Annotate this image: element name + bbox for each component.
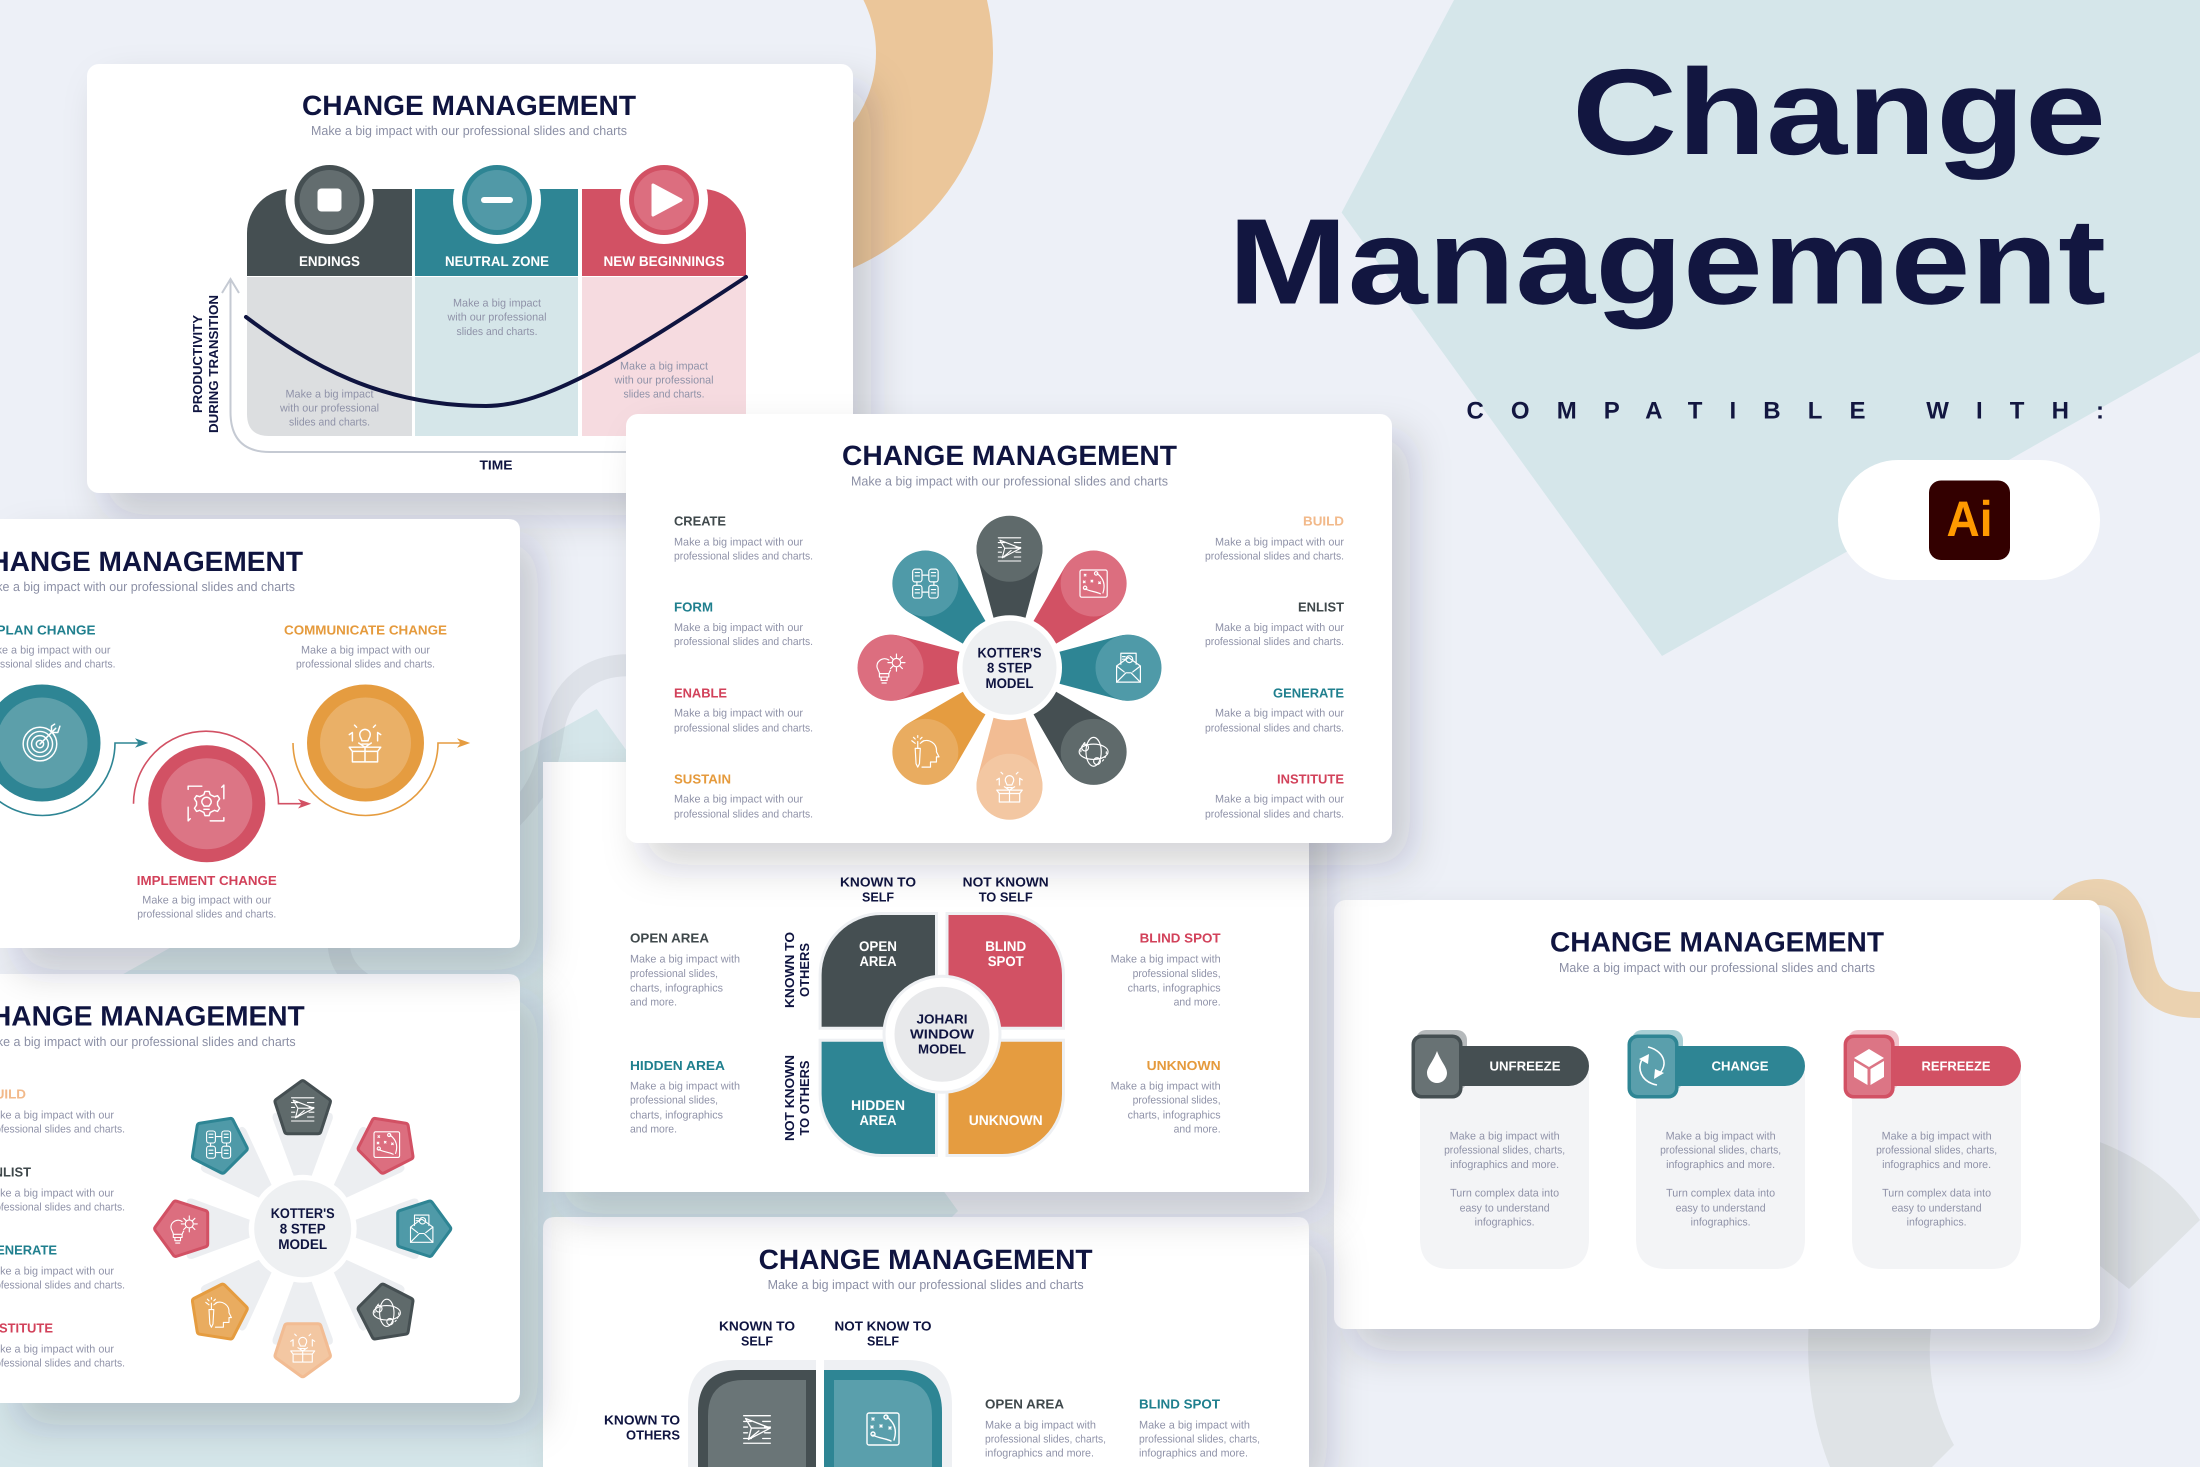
step: change (1628, 1030, 1805, 1269)
text: form: professional slides and charts. (674, 636, 813, 648)
column headers: SELF (867, 1334, 899, 1348)
text: generate (1205, 686, 1344, 734)
kotter flower chart: KOTTER'S (978, 644, 1042, 660)
column headers: KNOWN TO (719, 1318, 795, 1334)
panel: kotter pentagon slide (0, 974, 520, 1403)
step: unfreeze: professional slides, charts, (1444, 1144, 1565, 1156)
column body text: Make a big impact (453, 298, 541, 310)
text: institute (0, 1320, 125, 1370)
text: blind spot (1111, 930, 1221, 1008)
text: implement change (137, 873, 277, 920)
text: enable: Make a big impact with our (674, 708, 803, 720)
background shape: peach ring (853, 0, 993, 268)
column headers: NOT KNOW TO (834, 1318, 932, 1334)
column body text: slides and charts. (456, 326, 538, 338)
kotter pentagon wheel: KOTTER'S (271, 1205, 335, 1221)
text: hidden area: professional slides, (630, 1094, 718, 1106)
johari quadrants (822, 915, 1062, 1154)
panel: plan implement communicate slide (0, 519, 520, 948)
text: implement change: professional slides and charts. (137, 908, 276, 920)
text: communicate change: Make a big impact with our (301, 644, 430, 656)
circle: communicate (307, 684, 424, 802)
johari quadrants: HIDDEN (851, 1097, 905, 1113)
slide subtitle: Make a big impact with our professional slides and charts (311, 123, 627, 138)
text: build: Make a big impact with our (1215, 536, 1344, 548)
main title (1228, 44, 2106, 330)
panel: johari window slide (543, 762, 1309, 1192)
column headers (247, 189, 746, 276)
arrow: communicate (293, 738, 470, 816)
text: open area: infographics and more. (985, 1448, 1094, 1460)
background shape: peach squiggle (2050, 892, 2200, 1005)
step: change: Turn complex data into (1666, 1188, 1775, 1200)
column body text: slides and charts. (289, 416, 370, 428)
johari quadrants: UNKNOWN (969, 1112, 1043, 1128)
johari quadrants: MODEL (918, 1042, 966, 1056)
arrow: implement (134, 731, 311, 808)
text: blind spot (1139, 1396, 1260, 1460)
johari quadrants: OPEN (859, 938, 897, 954)
text: institute (1205, 772, 1344, 820)
text: unknown: charts, infographics (1128, 1110, 1221, 1122)
text: unknown: UNKNOWN (1147, 1058, 1221, 1073)
step: unfreeze: infographics and more. (1450, 1159, 1559, 1171)
text: unknown: Make a big impact with (1111, 1080, 1221, 1092)
step: unfreeze (1412, 1030, 1589, 1269)
icon: stop (286, 156, 374, 244)
productivity curve (246, 277, 746, 406)
step: change: infographics and more. (1666, 1159, 1775, 1171)
background shape: grey arc bottom (1808, 1320, 1954, 1467)
text: create: Make a big impact with our (674, 536, 803, 548)
y axis label (190, 295, 221, 433)
text: create: CREATE (674, 514, 726, 528)
slide title: CHANGE MANAGEMENT (1550, 926, 1884, 958)
rotated row headers: OTHERS (797, 943, 812, 997)
row header: OTHERS (626, 1428, 680, 1442)
text: form: FORM (674, 600, 713, 614)
text: open area: professional slides, (630, 968, 718, 980)
text: unknown (1111, 1058, 1221, 1136)
johari quadrants: AREA (860, 1112, 896, 1128)
text: blind spot: charts, infographics (1128, 982, 1221, 994)
step: change: professional slides, charts, (1660, 1144, 1781, 1156)
slide subtitle: Make a big impact with our professional slides and charts (768, 1277, 1084, 1292)
text: open area: and more. (630, 996, 677, 1008)
header labels: NEW BEGINNINGS (604, 253, 724, 269)
text: build: BUILD (1303, 514, 1344, 528)
text: blind spot: infographics and more. (1139, 1448, 1248, 1460)
text: blind spot: professional slides, (1133, 968, 1221, 980)
text: blind spot: Make a big impact with (1111, 954, 1221, 966)
column headers: SELF (862, 890, 894, 904)
text: enable: professional slides and charts. (674, 722, 813, 734)
text: open area: professional slides, charts, (985, 1434, 1106, 1446)
kotter pentagon wheel: MODEL (278, 1236, 328, 1252)
text: institute: INSTITUTE (1277, 772, 1344, 786)
kotter flower chart: 8 STEP (987, 660, 1032, 676)
step: refreeze: professional slides, charts, (1876, 1144, 1997, 1156)
column headers: KNOWN TO (840, 874, 916, 890)
text: sustain: SUSTAIN (674, 772, 731, 786)
text: communicate change: professional slides and charts. (296, 658, 435, 670)
rotated row headers: KNOWN TO (782, 932, 797, 1008)
rotated row headers (782, 932, 812, 1141)
text: blind spot: and more. (1174, 996, 1221, 1008)
text: form (674, 600, 813, 648)
kotter pentagon wheel (158, 1084, 448, 1374)
y axis label: PRODUCTIVITY (190, 315, 205, 413)
icon: Ai logo (1929, 480, 2010, 560)
johari quadrants: AREA (860, 953, 896, 969)
text: create (674, 514, 813, 562)
text: open area: charts, infographics (630, 982, 723, 994)
column headers: NOT KNOWN (963, 874, 1049, 890)
slide title: CHANGE MANAGEMENT (759, 1244, 1093, 1275)
text: sustain: Make a big impact with our (674, 794, 803, 806)
slide subtitle: Make a big impact with our professional slides and charts (1559, 960, 1875, 975)
text: hidden area: HIDDEN AREA (630, 1058, 726, 1073)
step: unfreeze: easy to understand (1460, 1202, 1550, 1214)
step: refreeze: infographics and more. (1882, 1159, 1991, 1171)
text: create: professional slides and charts. (674, 550, 813, 562)
step: refreeze: easy to understand (1892, 1202, 1982, 1214)
header labels (299, 253, 724, 269)
icon: pause dash (453, 156, 541, 244)
text: build (1205, 514, 1344, 562)
step: change: CHANGE (1712, 1058, 1769, 1074)
column body text: with our professional (279, 402, 379, 414)
step: change: infographics. (1691, 1216, 1751, 1228)
text: enlist: Make a big impact with our (1215, 622, 1344, 634)
text: blind spot: Make a big impact with (1139, 1420, 1250, 1432)
column body text: slides and charts. (624, 388, 704, 400)
text: blind spot: BLIND SPOT (1140, 930, 1221, 946)
panel: kotter flower slide (626, 414, 1392, 843)
text: open area: Make a big impact with (630, 954, 740, 966)
column headers (840, 874, 1049, 904)
kotter flower chart: MODEL (986, 675, 1034, 691)
text: unknown: and more. (1174, 1124, 1221, 1136)
column bodies (247, 277, 746, 436)
column body text: with our professional (614, 374, 714, 386)
step: change: easy to understand (1676, 1202, 1766, 1214)
text: sustain (674, 772, 813, 820)
kotter flower chart (858, 516, 1162, 820)
row header: KNOWN TO (604, 1412, 680, 1428)
column headers (719, 1318, 932, 1348)
slide title: CHANGE MANAGEMENT (302, 90, 636, 121)
text: implement change: Make a big impact with our (142, 894, 272, 906)
text: generate (0, 1242, 125, 1292)
slide title: CHANGE MANAGEMENT (842, 440, 1177, 471)
text: communicate change (284, 622, 447, 670)
column body text: with our professional (447, 312, 546, 324)
johari quadrants: BLIND (985, 938, 1026, 954)
compatible with label: COMPATIBLE WITH: (1466, 398, 2104, 424)
text: hidden area: and more. (630, 1124, 677, 1136)
icon: play (620, 156, 708, 244)
main title: Management (1228, 194, 2106, 330)
badge: adobe illustrator (1838, 460, 2100, 580)
text: open area: Make a big impact with (985, 1420, 1096, 1432)
panel: bottom johari icon slide (543, 1217, 1309, 1467)
text: form: Make a big impact with our (674, 622, 803, 634)
text: communicate change: COMMUNICATE CHANGE (284, 622, 447, 638)
step: unfreeze: Turn complex data into (1450, 1188, 1559, 1200)
icon: Ai logo: Ai (1946, 491, 1992, 547)
text: open area: OPEN AREA (985, 1396, 1065, 1412)
text: hidden area: charts, infographics (630, 1110, 723, 1122)
row header (604, 1412, 680, 1442)
text: generate: professional slides and charts. (1205, 722, 1344, 734)
circle: plan (0, 684, 100, 802)
johari quadrants: JOHARI (916, 1012, 968, 1026)
step: unfreeze: Make a big impact with (1450, 1130, 1560, 1142)
text: enlist: professional slides and charts. (1205, 636, 1344, 648)
text: open area (985, 1396, 1106, 1460)
step: refreeze (1844, 1030, 2021, 1269)
arrow: plan (0, 738, 148, 816)
column body text: Make a big impact (620, 360, 708, 372)
background shape: teal polygon top right (1342, 0, 2200, 656)
step: refreeze: REFREEZE (1922, 1058, 1991, 1074)
header labels: ENDINGS (299, 253, 360, 269)
text: blind spot: professional slides, charts, (1139, 1434, 1260, 1446)
header labels: NEUTRAL ZONE (445, 253, 549, 269)
text: enable: ENABLE (674, 686, 727, 700)
step: unfreeze: infographics. (1475, 1216, 1535, 1228)
text: institute: Make a big impact with our (1215, 794, 1344, 806)
text: unknown: professional slides, (1133, 1094, 1221, 1106)
step: unfreeze: UNFREEZE (1490, 1058, 1561, 1074)
text: hidden area (630, 1058, 740, 1136)
text: sustain: professional slides and charts. (674, 808, 813, 820)
text: enable (674, 686, 813, 734)
johari quadrants: SPOT (988, 953, 1024, 969)
text: enlist (1205, 600, 1344, 648)
main title: Change (1572, 44, 2106, 180)
column headers: TO SELF (979, 890, 1033, 904)
column headers: SELF (741, 1334, 773, 1348)
text: hidden area: Make a big impact with (630, 1080, 740, 1092)
slide subtitle: Make a big impact with our professional slides and charts (851, 474, 1168, 488)
text: open area (630, 930, 740, 1008)
step: refreeze: Turn complex data into (1882, 1188, 1991, 1200)
background shape: grey squiggle (339, 665, 640, 990)
background shape: teal polygon lower left (0, 709, 958, 1467)
text: generate: GENERATE (1273, 686, 1344, 700)
text: open area: OPEN AREA (630, 930, 710, 946)
text: implement change: IMPLEMENT CHANGE (137, 873, 277, 888)
text: institute: professional slides and charts. (1205, 808, 1344, 820)
step: refreeze: Make a big impact with (1882, 1130, 1992, 1142)
column body text (279, 298, 714, 428)
panel: productivity transition curve slide (87, 64, 853, 493)
text: build (0, 1086, 125, 1136)
text: blind spot: BLIND SPOT (1139, 1396, 1220, 1412)
johari quadrants: WINDOW (910, 1026, 975, 1042)
quadrant grid (688, 1360, 952, 1467)
text: plan change (0, 622, 116, 670)
text: build: professional slides and charts. (1205, 550, 1344, 562)
text: generate: Make a big impact with our (1215, 708, 1344, 720)
circle: implement (148, 745, 265, 862)
panel: unfreeze change refreeze slide (1334, 900, 2100, 1329)
rotated row headers: NOT KNOWN (782, 1055, 797, 1141)
kotter pentagon wheel: 8 STEP (280, 1220, 326, 1236)
text: enlist (0, 1164, 125, 1214)
y axis label: DURING TRANSITION (206, 295, 221, 433)
rotated row headers: TO OTHERS (797, 1060, 812, 1136)
axes arrow (222, 279, 640, 452)
step: change: Make a big impact with (1666, 1130, 1776, 1142)
background shape: grey arc right (2080, 1135, 2200, 1289)
text: enlist: ENLIST (1298, 600, 1344, 614)
column body text: Make a big impact (286, 388, 374, 400)
step: refreeze: infographics. (1907, 1216, 1967, 1228)
x axis label: TIME (480, 458, 513, 472)
